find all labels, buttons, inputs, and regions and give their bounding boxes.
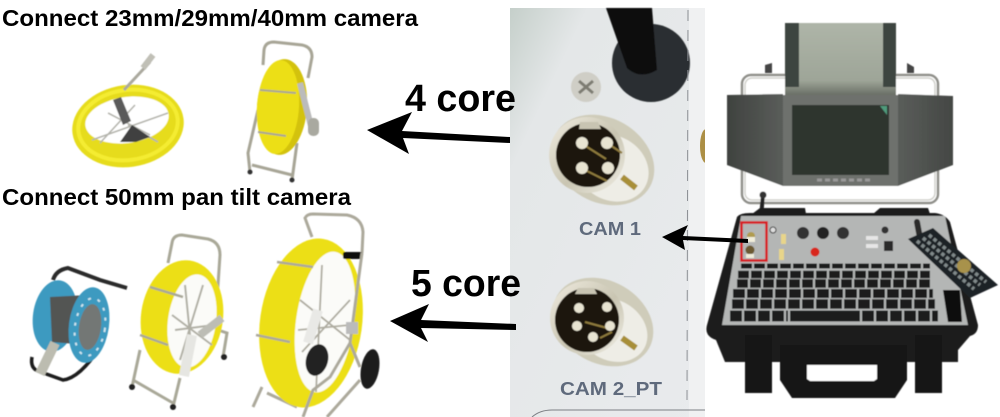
label: CAM 2_PT: CAM 2_PT bbox=[560, 379, 662, 399]
control plate bbox=[722, 216, 968, 325]
icon: yellow cable coil bbox=[67, 55, 189, 174]
port highlight bbox=[742, 222, 766, 260]
label: 4 core: 4 core bbox=[405, 78, 516, 120]
icon: blue reel with grey cable bbox=[28, 268, 127, 380]
arrow: case to CAM 1 bbox=[662, 225, 748, 250]
case ports bbox=[746, 222, 920, 260]
icon: 4 pin connector bbox=[535, 97, 671, 223]
keyboard bbox=[730, 266, 938, 316]
label: CAM 1: CAM 1 bbox=[579, 219, 641, 239]
icon: medium yellow cable reel bbox=[129, 235, 231, 410]
icon: control case bbox=[706, 23, 998, 398]
antenna bbox=[760, 195, 763, 228]
icon: screw bbox=[571, 72, 601, 102]
monitor bbox=[783, 95, 898, 186]
icon: large yellow cable reel with wheels bbox=[249, 214, 382, 417]
icon: 5 pin connector bbox=[537, 260, 669, 384]
icon: cable grommet bbox=[606, 8, 690, 102]
case hinges bbox=[752, 208, 930, 214]
sun shade top flap bbox=[785, 23, 896, 95]
label: 5 core: 5 core bbox=[411, 263, 521, 305]
arrow: 4 core bbox=[367, 112, 510, 154]
heading: 5 core cameras: Connect 50mm pan tilt camera bbox=[2, 184, 351, 210]
remote control bbox=[908, 228, 998, 298]
heading: 4 core cameras: Connect 23mm/29mm/40mm camera bbox=[2, 5, 418, 31]
case latches and handle bbox=[745, 335, 942, 398]
case body bbox=[706, 213, 978, 362]
arrow: 5 core bbox=[390, 304, 516, 342]
icon: small yellow cable reel on frame bbox=[248, 42, 319, 182]
sun shade left flap bbox=[727, 94, 783, 186]
panel: connector photo bbox=[510, 8, 713, 417]
lid frame bbox=[742, 63, 938, 203]
sun shade right flap bbox=[898, 94, 953, 186]
